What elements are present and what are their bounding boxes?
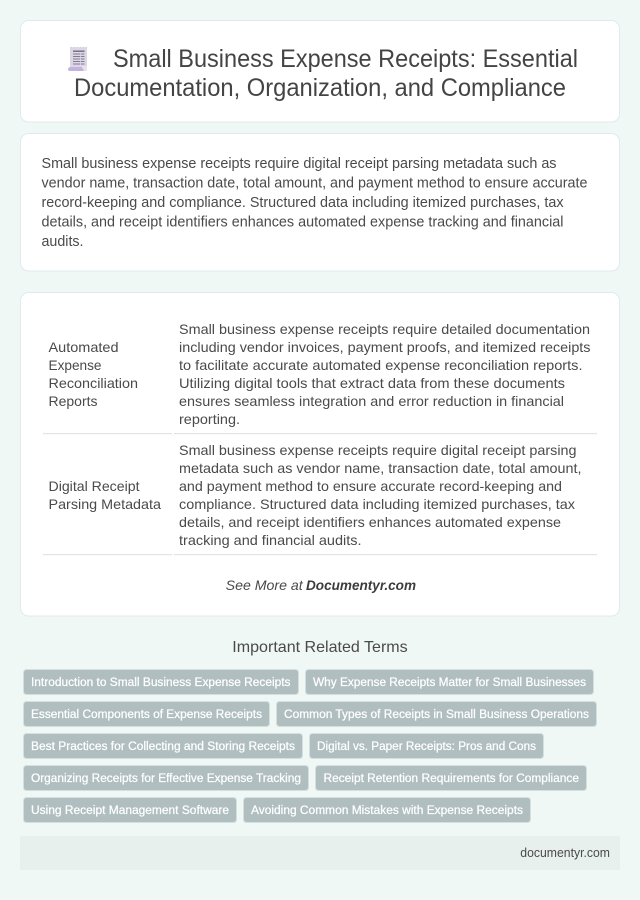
tag: common types: Common Types of Receipts in Small Business Operations xyxy=(284,707,589,721)
row label: automated expense reconciliation reports: Expense xyxy=(48,357,102,373)
row description: digital receipt parsing metadata: tracking and financial audits. xyxy=(179,532,362,548)
row description: digital receipt parsing metadata: compliance. Structured data including itemized purchases, tax xyxy=(179,496,575,512)
table row: digital receipt parsing metadata xyxy=(48,442,582,548)
row label: automated expense reconciliation reports: Automated xyxy=(48,339,118,355)
tag: why receipts matter xyxy=(306,670,594,694)
panel: introduction text xyxy=(20,134,620,271)
tag: avoiding mistakes xyxy=(244,798,530,822)
link: see more at documentyr.com: See More at xyxy=(226,577,304,593)
row description: digital receipt parsing metadata: Small business expense receipts require digital receipt parsing xyxy=(179,442,576,458)
row description: digital receipt parsing metadata: and payment method to ensure accurate record-keeping and xyxy=(179,478,562,494)
heading: important related terms: Important Related Terms xyxy=(232,639,408,656)
text block: intro paragraph: record-keeping and compliance. Structured data including itemized purchases, tax xyxy=(42,195,564,211)
row description: automated expense reconciliation reports: ensures seamless integration and error reduction in financial xyxy=(179,393,564,409)
tag: introduction xyxy=(24,670,298,694)
tag: essential components xyxy=(24,702,270,726)
panel: title header xyxy=(20,20,620,122)
row description: automated expense reconciliation reports: to facilitate accurate automated expense reconciliation reports. xyxy=(179,357,582,373)
tag: common types xyxy=(276,702,596,726)
link: see more at documentyr.com xyxy=(226,577,416,593)
footer: documentyr.com xyxy=(520,846,610,860)
tag: avoiding mistakes: Avoiding Common Mistakes with Expense Receipts xyxy=(251,803,523,817)
tag: best practices xyxy=(24,734,302,758)
tag: digital vs paper xyxy=(310,734,544,758)
tag: organizing receipts: Organizing Receipts for Effective Expense Tracking xyxy=(31,771,301,785)
text block: intro paragraph: vendor name, transaction date, total amount, and payment method to ensure accurate xyxy=(42,176,588,192)
tag: organizing receipts xyxy=(24,766,308,790)
text block: intro paragraph: details, and receipt identifiers enhances automated expense tracking and financial xyxy=(42,214,564,230)
row label: automated expense reconciliation reports: Reconciliation xyxy=(48,375,138,391)
tag: retention requirements: Receipt Retention Requirements for Compliance xyxy=(324,771,579,785)
row description: digital receipt parsing metadata xyxy=(179,442,582,548)
row label: digital receipt parsing metadata xyxy=(48,478,161,512)
row description: automated expense reconciliation reports: including vendor invoices, payment proofs, and itemized receipts xyxy=(179,339,590,355)
tag: best practices: Best Practices for Collecting and Storing Receipts xyxy=(31,739,295,753)
heading: title: Documentation, Organization, and Compliance xyxy=(74,74,566,102)
tag: receipt management software: Using Receipt Management Software xyxy=(31,803,229,817)
row label: automated expense reconciliation reports: Reports xyxy=(48,393,98,409)
row description: digital receipt parsing metadata: metadata such as vendor name, transaction date, total amount, xyxy=(179,460,582,476)
tag: essential components: Essential Components of Expense Receipts xyxy=(31,707,262,721)
row label: automated expense reconciliation reports xyxy=(48,339,138,409)
row description: automated expense reconciliation reports: Utilizing digital tools that extract data from these documents xyxy=(179,375,565,391)
heading: title xyxy=(74,45,578,102)
tag: receipt management software xyxy=(24,798,236,822)
row description: automated expense reconciliation reports xyxy=(179,321,590,427)
table row: automated expense reconciliation reports xyxy=(48,321,590,427)
row label: digital receipt parsing metadata: Parsing Metadata xyxy=(48,496,161,512)
text block: intro paragraph xyxy=(42,156,588,250)
heading: title: Small Business Expense Receipts: Essential xyxy=(113,45,578,73)
row label: digital receipt parsing metadata: Digital Receipt xyxy=(48,478,140,494)
text block: intro paragraph: audits. xyxy=(42,234,84,250)
tag: retention requirements xyxy=(316,766,586,790)
tag: introduction: Introduction to Small Business Expense Receipts xyxy=(31,675,290,689)
tag: why receipts matter: Why Expense Receipts Matter for Small Businesses xyxy=(313,675,586,689)
row description: automated expense reconciliation reports: reporting. xyxy=(179,411,240,427)
link: see more at documentyr.com: Documentyr.com xyxy=(306,577,416,593)
text block: intro paragraph: Small business expense receipts require digital receipt parsing metadata such as xyxy=(42,156,556,172)
tag: digital vs paper: Digital vs. Paper Receipts: Pros and Cons xyxy=(317,739,536,753)
footer xyxy=(20,836,620,870)
panel: terms table xyxy=(20,292,620,616)
row description: digital receipt parsing metadata: details, and receipt identifiers enhances automated expense xyxy=(179,514,561,530)
icon: receipt xyxy=(68,47,88,71)
row description: automated expense reconciliation reports: Small business expense receipts require detailed documentation xyxy=(179,321,590,337)
tag list: related terms xyxy=(24,670,596,822)
